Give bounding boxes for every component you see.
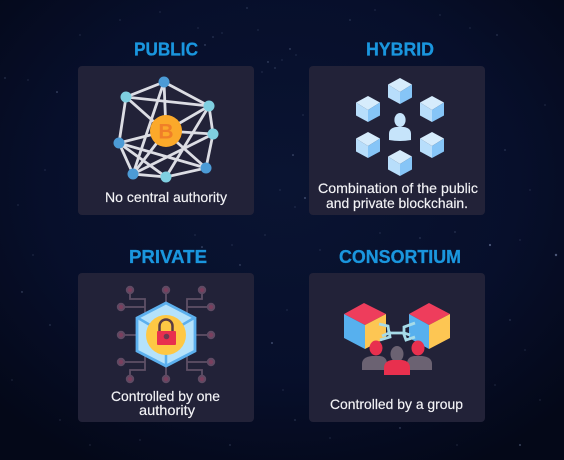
heading: private: PRIVATE xyxy=(129,247,207,267)
caption: private: authority xyxy=(139,402,195,418)
caption: public: No central authority xyxy=(105,189,227,205)
caption: hybrid: Combination of the public xyxy=(318,180,478,196)
heading: consortium: CONSORTIUM xyxy=(339,247,461,267)
caption: private: Controlled by one xyxy=(111,388,220,404)
panel: public xyxy=(78,66,254,215)
caption: hybrid: and private blockchain. xyxy=(326,195,468,211)
icon: padlock hexagon with circuit xyxy=(118,287,214,382)
panel: private xyxy=(78,273,254,422)
heading: public: PUBLIC xyxy=(134,40,198,60)
panel: hybrid xyxy=(309,66,485,215)
icon: linked cubes and group xyxy=(344,303,450,375)
caption: private xyxy=(111,388,220,418)
panel: consortium xyxy=(309,273,485,422)
caption: hybrid xyxy=(318,180,478,211)
caption: consortium: Controlled by a group xyxy=(330,396,463,412)
heading: hybrid: HYBRID xyxy=(366,40,434,60)
icon: cubes and user xyxy=(356,78,444,176)
icon: bitcoin network: B xyxy=(158,120,174,144)
icon: bitcoin network xyxy=(114,76,218,182)
